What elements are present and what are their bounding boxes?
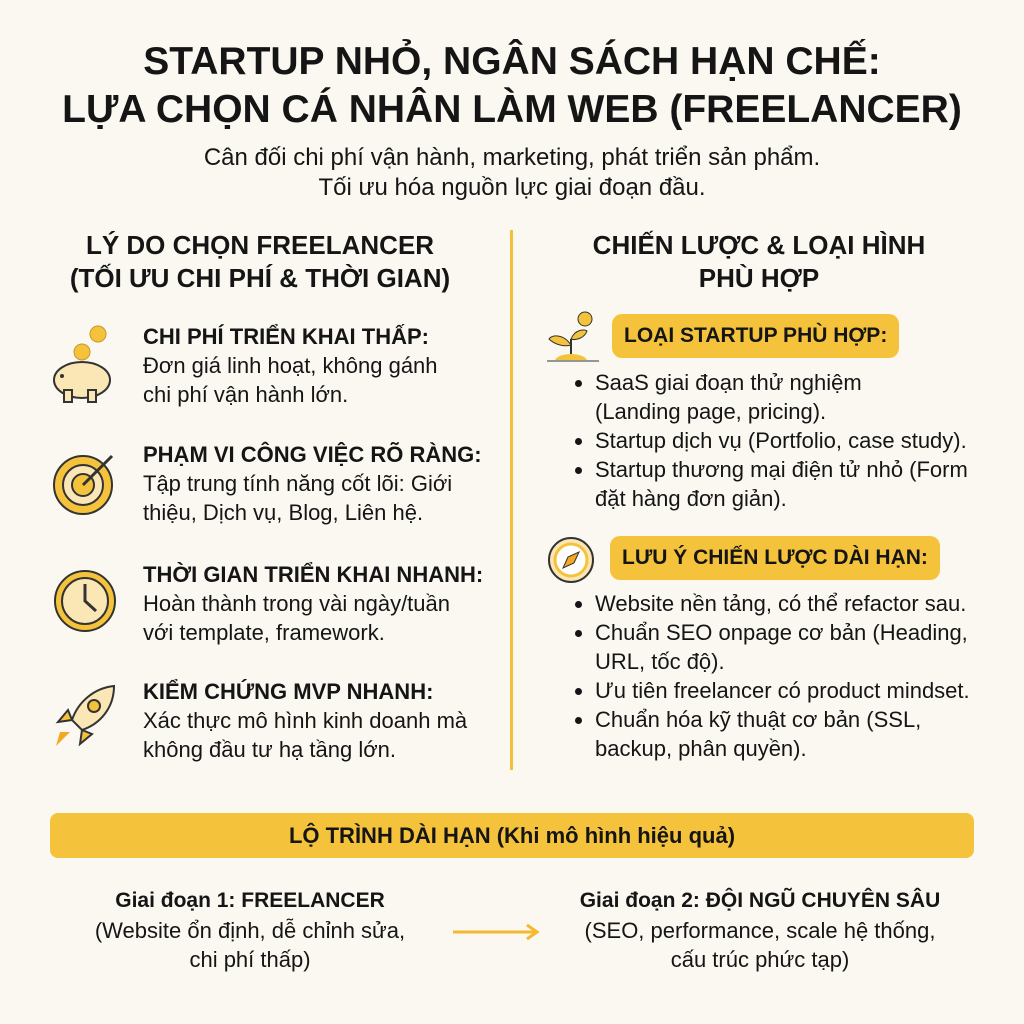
stage 2: Giai đoạn 2: ĐỘI NGŨ CHUYÊN SÂU (580, 889, 940, 912)
list: startup types: đặt hàng đơn giản). (595, 486, 787, 511)
left heading: LÝ DO CHỌN FREELANCER (86, 230, 434, 260)
stage 1: Giai đoạn 1: FREELANCER (115, 889, 385, 912)
item: cost: CHI PHÍ TRIỂN KHAI THẤP: (143, 324, 429, 349)
item: time: THỜI GIAN TRIỂN KHAI NHANH: (143, 562, 483, 587)
list: startup types: SaaS giai đoạn thử nghiệm (595, 370, 862, 395)
roadmap bar (50, 813, 974, 858)
item: mvp: KIỂM CHỨNG MVP NHANH: (143, 679, 433, 704)
icon: clock (54, 570, 116, 632)
subtitle: Cân đối chi phí vận hành, marketing, phát triển sản phẩm. (204, 144, 820, 171)
subtitle: Tối ưu hóa nguồn lực giai đoạn đầu. (318, 174, 706, 201)
roadmap bar: LỘ TRÌNH DÀI HẠN (Khi mô hình hiệu quả) (289, 823, 735, 848)
list: long-term notes: backup, phân quyền). (595, 736, 807, 761)
list: long-term notes (575, 591, 970, 761)
list: startup types: Startup dịch vụ (Portfolio, case study). (595, 428, 967, 453)
list: startup types: (Landing page, pricing). (595, 399, 826, 424)
item: cost: Đơn giá linh hoạt, không gánh (143, 353, 438, 378)
list: startup types (575, 370, 968, 511)
item: scope: Tập trung tính năng cốt lõi: Giới (143, 471, 452, 496)
icon: target (53, 455, 113, 515)
item: cost: chi phí vận hành lớn. (143, 382, 348, 407)
divider (510, 230, 513, 770)
icon: sprout (547, 312, 599, 362)
badge: startup types (612, 314, 899, 358)
badge: long-term notes (610, 536, 940, 580)
list: long-term notes: Ưu tiên freelancer có product mindset. (595, 678, 970, 703)
item: time: Hoàn thành trong vài ngày/tuần (143, 591, 450, 616)
item: time: với template, framework. (143, 620, 385, 645)
stage 2 (580, 888, 940, 972)
stage 1: chi phí thấp) (189, 947, 311, 972)
list: long-term notes: Chuẩn hóa kỹ thuật cơ bản (SSL, (595, 707, 921, 732)
title: LỰA CHỌN CÁ NHÂN LÀM WEB (FREELANCER) (62, 88, 962, 131)
stage 2: (SEO, performance, scale hệ thống, (585, 918, 935, 943)
right heading (593, 230, 925, 293)
icon: compass (548, 537, 594, 583)
list: startup types: Startup thương mại điện tử nhỏ (Form (595, 457, 968, 482)
arrow (453, 924, 540, 940)
right heading: PHÙ HỢP (699, 263, 819, 293)
list: long-term notes: Website nền tảng, có thể refactor sau. (595, 591, 966, 616)
item: scope: PHẠM VI CÔNG VIỆC RÕ RÀNG: (143, 442, 482, 467)
item: mvp: không đầu tư hạ tầng lớn. (143, 737, 396, 762)
title (62, 39, 962, 131)
stage 2: cấu trúc phức tạp) (671, 947, 849, 972)
icon: piggy bank (53, 326, 111, 403)
right heading: CHIẾN LƯỢC & LOẠI HÌNH (593, 230, 925, 260)
list: long-term notes: Chuẩn SEO onpage cơ bản (Heading, (595, 620, 968, 645)
badge: startup types: LOẠI STARTUP PHÙ HỢP: (624, 324, 887, 347)
icon: rocket (56, 684, 115, 746)
badge: long-term notes: LƯU Ý CHIẾN LƯỢC DÀI HẠN: (622, 546, 928, 569)
item: mvp (143, 678, 468, 762)
stage 1 (95, 889, 405, 972)
left heading: (TỐI ƯU CHI PHÍ & THỜI GIAN) (70, 263, 450, 293)
subtitle (204, 144, 820, 201)
item: scope (143, 442, 482, 525)
stage 1: (Website ổn định, dễ chỉnh sửa, (95, 918, 405, 943)
item: scope: thiệu, Dịch vụ, Blog, Liên hệ. (143, 500, 423, 525)
list: long-term notes: URL, tốc độ). (595, 649, 725, 674)
item: mvp: Xác thực mô hình kinh doanh mà (143, 708, 467, 733)
item: time (143, 562, 483, 645)
left heading (70, 230, 450, 293)
title: STARTUP NHỎ, NGÂN SÁCH HẠN CHẾ: (143, 40, 881, 83)
item: cost (143, 324, 438, 407)
